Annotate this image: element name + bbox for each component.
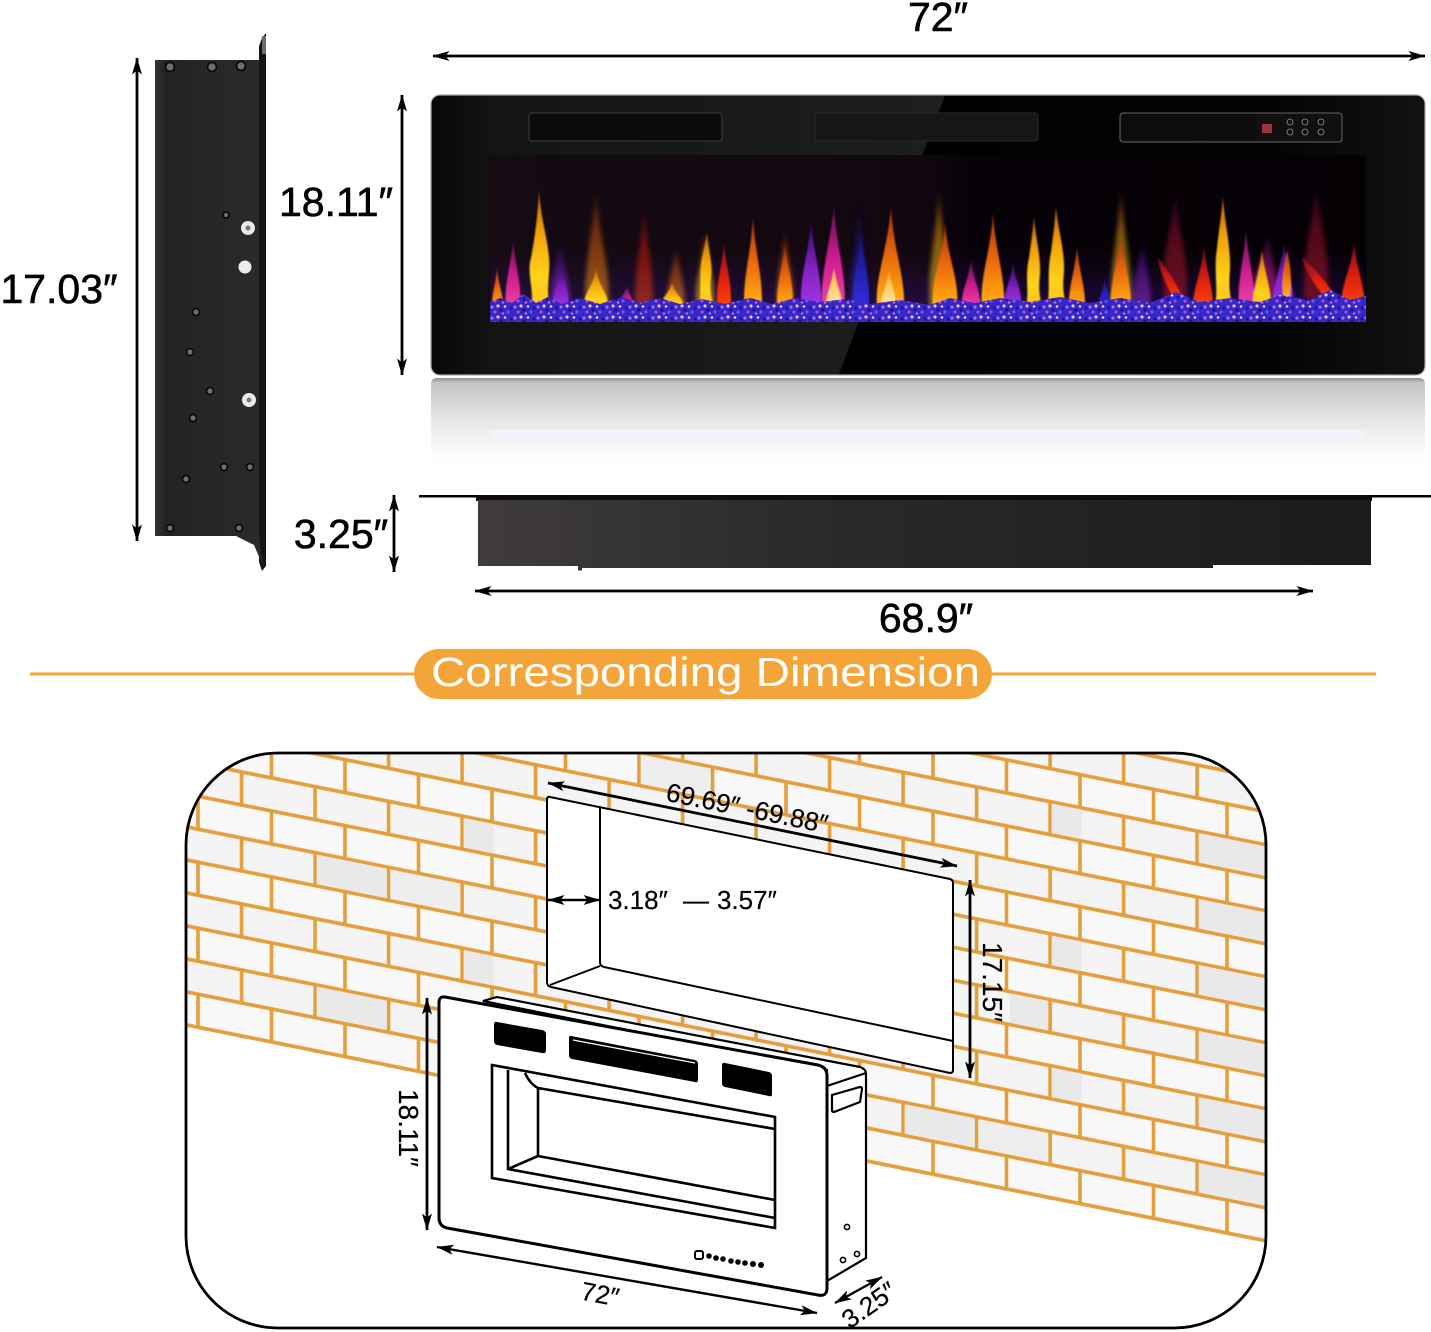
- glass panel: [431, 95, 1425, 375]
- recessed wall opening: [547, 797, 953, 1073]
- middle vent: [815, 113, 1038, 141]
- glass reflection: [432, 96, 945, 374]
- background flames: [550, 183, 1328, 312]
- faint reflected embers: [490, 430, 1365, 438]
- banner text: Corresponding Dimension: [431, 649, 980, 695]
- blue ember bed: [490, 290, 1366, 322]
- dimension: depth 3.25 inches: [294, 495, 394, 572]
- foreground flames: [492, 190, 1365, 312]
- label: 3.25: 3.25″: [294, 511, 388, 557]
- brick wall: [187, 754, 1265, 1242]
- reflection gradient: [431, 378, 1425, 470]
- arrow: 3.25: [393, 495, 395, 572]
- fireplace front photo: [431, 95, 1425, 375]
- vent highlight: [573, 1040, 695, 1063]
- section divider with banner: [30, 649, 1376, 699]
- label: 18.11: 18.11″: [279, 179, 393, 225]
- arrow: 3.25: [835, 1277, 882, 1303]
- arrow: 17.15: [969, 880, 971, 1078]
- arrow: 18.11: [426, 998, 428, 1230]
- washers: [238, 221, 256, 407]
- arrow: 3.18: [548, 899, 600, 901]
- under body: [478, 500, 1371, 570]
- left vent: [529, 113, 722, 141]
- front flange: [259, 33, 266, 571]
- fireplace depth dimension: [835, 1276, 902, 1332]
- installation diagram panel: [184, 752, 1268, 1330]
- bottom view of fireplace: [419, 495, 1431, 570]
- top plate: [419, 495, 1431, 498]
- arrow: 17.03: [136, 58, 138, 541]
- side holes: [840, 1224, 860, 1263]
- fireplace line drawing: [439, 997, 866, 1295]
- fireplace width dimension: [437, 1247, 817, 1313]
- label: 3.18 to 3.57: 3.18″: [608, 885, 668, 915]
- label: 69.69 to 69.88: 69.69″ -69.88″: [664, 777, 831, 839]
- arrow: 68.9: [475, 590, 1313, 592]
- side handle: [832, 1087, 862, 1112]
- arrow: 72: [437, 1247, 817, 1313]
- side view of fireplace: [155, 33, 266, 571]
- opening width dimension: [548, 777, 957, 866]
- label: 18.11: 18.11″: [393, 1089, 424, 1167]
- shaded bricks: [316, 754, 1265, 1206]
- firebox: [488, 155, 1366, 322]
- label: 17.03: 17.03″: [0, 266, 118, 312]
- label: 17.15: 17.15″: [977, 942, 1008, 1022]
- center vent icon: [569, 1036, 698, 1082]
- arrow: 18.11: [401, 95, 403, 375]
- arrow: 69.69: [548, 783, 957, 866]
- plate collar: [476, 495, 1372, 501]
- bottom foot: [236, 536, 263, 566]
- dark right reflection: [839, 96, 1424, 374]
- firebox opening: [492, 1065, 775, 1228]
- panel border: [186, 753, 1266, 1328]
- flame base haze: [490, 250, 1365, 306]
- label: 68.9: 68.9″: [879, 595, 973, 641]
- right vent icon: [722, 1063, 772, 1096]
- screws: [166, 62, 254, 532]
- banner pill: [414, 649, 992, 699]
- left vent icon: [494, 1022, 546, 1053]
- label: 3.18 to 3.57: 3.57″: [717, 885, 777, 915]
- front frame: [439, 997, 827, 1295]
- right vent with control panel: [1120, 113, 1342, 142]
- label: 3.18 to 3.57: —: [683, 885, 709, 915]
- opening depth dimension: [548, 885, 777, 915]
- side and top casing: [483, 997, 866, 1281]
- label: 72: 72″: [579, 1276, 622, 1312]
- control buttons: [695, 1251, 764, 1268]
- arrow: width: [433, 55, 1425, 57]
- divider line: [30, 672, 1376, 676]
- reflection under fireplace: [431, 378, 1425, 470]
- side edge: [827, 1073, 866, 1086]
- flange top highlight: [262, 36, 266, 54]
- side body: [155, 60, 259, 536]
